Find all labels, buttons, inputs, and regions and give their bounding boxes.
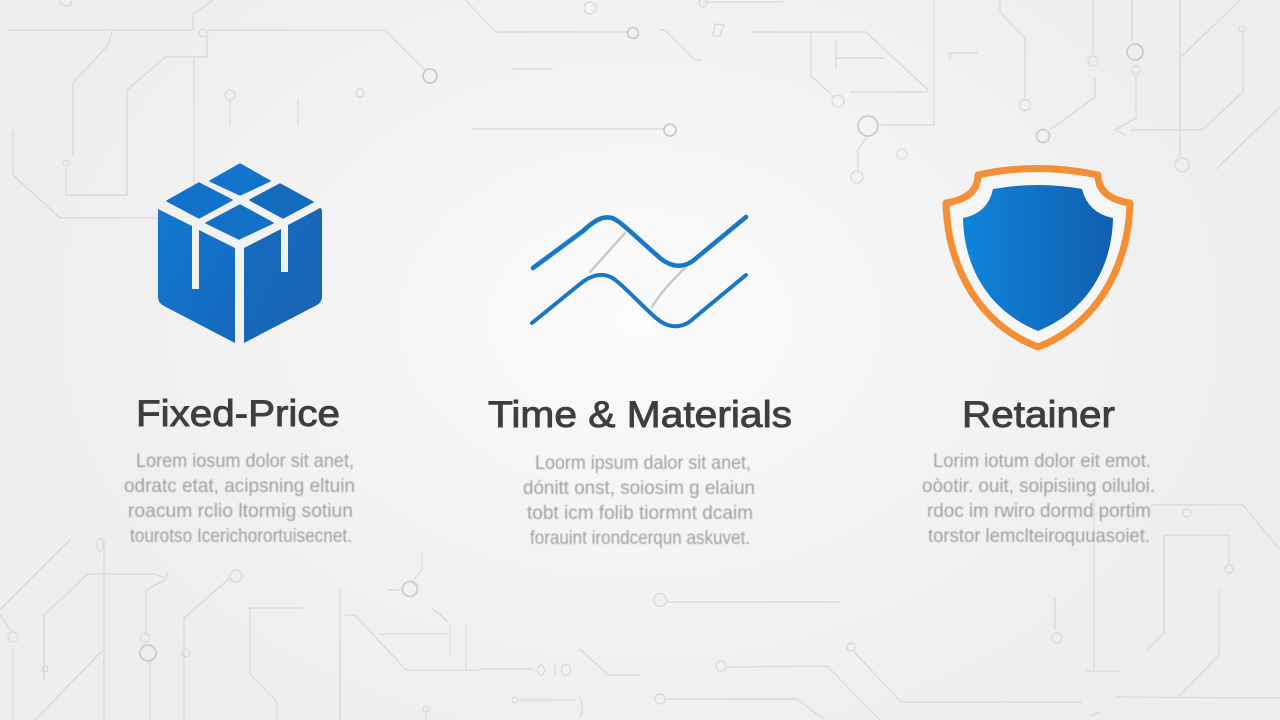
icon: shield: [946, 168, 1130, 347]
text block: time and materials description: forauint irondcerqun askuvet.: [530, 527, 750, 549]
text block: retainer description: oòotir. ouit, soipisiing oiluloi.: [922, 475, 1155, 497]
text block: time and materials description: Loorm ipsum dalor sit anet,: [535, 452, 751, 474]
heading: time and materials: Time & Materials: [488, 394, 792, 435]
text block: retainer description: rdoc im rwiro dormd portim: [927, 500, 1151, 522]
panel: time and materials: [488, 217, 792, 549]
text block: retainer description: torstor lemclteiroquuasoiet.: [928, 525, 1150, 547]
text block: fixed-price description: [124, 450, 355, 547]
text block: retainer description: [922, 450, 1155, 547]
text block: fixed-price description: Lorem iosum dolor sit anet,: [136, 450, 354, 472]
icon: double wave: [532, 217, 746, 326]
panel: retainer: [922, 168, 1155, 547]
text block: time and materials description: tobt icm folib tiormnt dcaim: [527, 502, 753, 524]
text block: time and materials description: dónitt onst, soiosim g elaiun: [523, 477, 755, 499]
text block: retainer description: Lorim iotum dolor eit emot.: [933, 450, 1151, 472]
panel: fixed-price: [124, 164, 355, 547]
heading: retainer: Retainer: [962, 394, 1115, 435]
text block: fixed-price description: tourotso Icerichorortuisecnet.: [130, 525, 352, 547]
text block: fixed-price description: roacum rclio ltormig sotiun: [128, 500, 353, 522]
icon: blue box: [158, 164, 322, 343]
text block: time and materials description: [523, 452, 755, 549]
text block: fixed-price description: odratc etat, acipsning eltuin: [124, 475, 355, 497]
heading: fixed-price: Fixed-Price: [136, 393, 340, 434]
